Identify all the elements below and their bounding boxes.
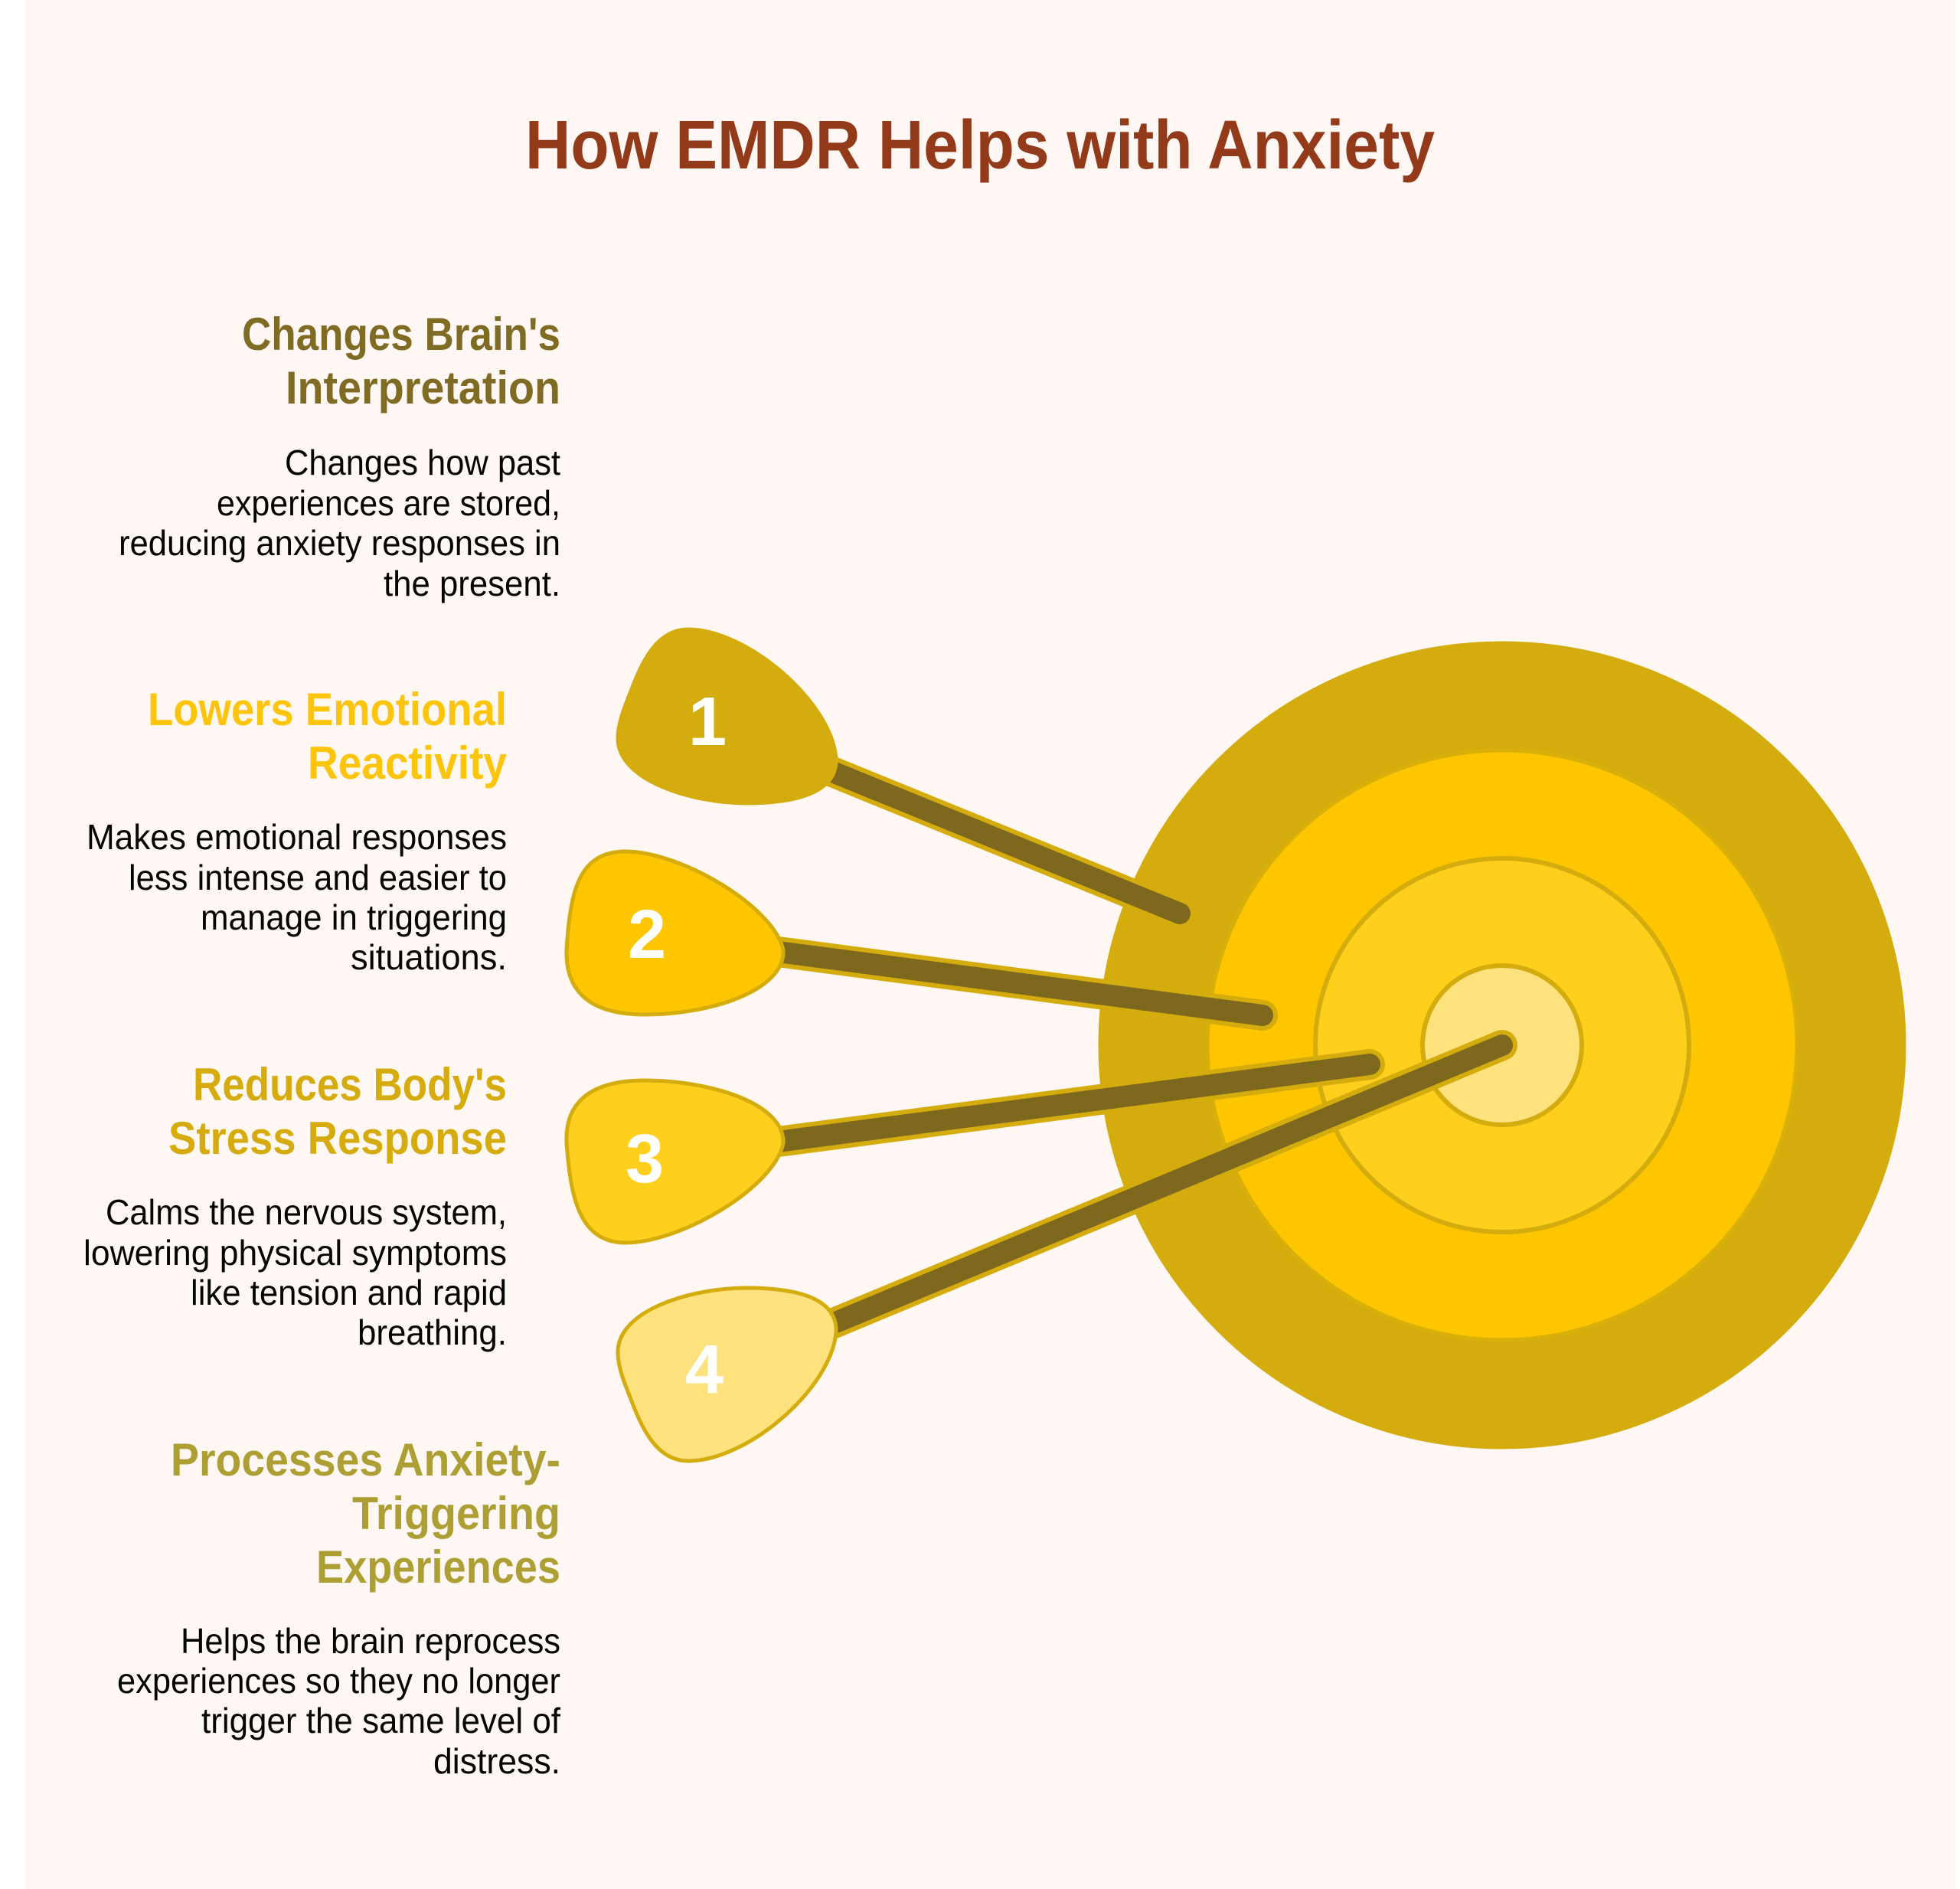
dart 2 head (567, 851, 783, 1015)
text block: changes brain's interpretation (119, 309, 560, 603)
heading: processes anxiety-triggering experiences (171, 1434, 560, 1593)
heading: changes brain's interpretation: Changes Brain's (242, 309, 560, 360)
body text: reduces body's stress response: lowering physical symptoms (83, 1233, 507, 1273)
body text: lowers emotional reactivity: Makes emotional responses (87, 817, 507, 857)
dart 2 (567, 851, 1263, 1015)
body text: changes brain's interpretation: the present. (384, 564, 560, 603)
text block: reduces body's stress response (83, 1059, 507, 1352)
heading: lowers emotional reactivity: Reactivity (308, 737, 508, 789)
heading: changes brain's interpretation: Interpretation (286, 362, 560, 413)
body text: processes anxiety-triggering experiences: distress. (433, 1741, 560, 1781)
dart 2 number: 2 (628, 897, 666, 973)
dart 4 head (618, 1288, 836, 1461)
heading: processes anxiety-triggering experiences: Experiences (316, 1541, 560, 1593)
body text: reduces body's stress response: breathing. (358, 1312, 507, 1352)
body text: processes anxiety-triggering experiences (117, 1621, 560, 1781)
dart 3 number: 3 (626, 1121, 664, 1198)
body text: reduces body's stress response (83, 1192, 507, 1352)
dart 4 (618, 1045, 1502, 1461)
dart 3 shaft (778, 1064, 1370, 1142)
heading: reduces body's stress response (168, 1059, 507, 1164)
body text: changes brain's interpretation (119, 443, 560, 603)
dart 4 shaft (828, 1045, 1502, 1325)
heading: reduces body's stress response: Stress Response (168, 1113, 507, 1164)
dart 1 shaft (827, 770, 1180, 913)
body text: reduces body's stress response: like tension and rapid (191, 1273, 507, 1312)
dart 1 number: 1 (688, 684, 727, 760)
text block: processes anxiety-triggering experiences (117, 1434, 560, 1781)
dart 1 (618, 629, 1180, 913)
heading: lowers emotional reactivity (148, 684, 508, 789)
body text: lowers emotional reactivity: manage in triggering (201, 897, 507, 937)
bullseye (1423, 966, 1582, 1125)
body text: lowers emotional reactivity: less intense and easier to (129, 858, 507, 897)
heading: processes anxiety-triggering experiences: Processes Anxiety- (171, 1434, 560, 1485)
body text: processes anxiety-triggering experiences: trigger the same level of (201, 1701, 560, 1740)
body text: lowers emotional reactivity (87, 817, 507, 977)
body text: changes brain's interpretation: experiences are stored, (217, 483, 560, 523)
heading: processes anxiety-triggering experiences: Triggering (352, 1488, 560, 1539)
heading: reduces body's stress response: Reduces Body's (193, 1059, 507, 1110)
outer ring (1100, 643, 1904, 1447)
body text: changes brain's interpretation: Changes how past (285, 443, 560, 482)
body text: processes anxiety-triggering experiences: experiences so they no longer (117, 1661, 560, 1701)
dart 1 head (618, 629, 836, 803)
body text: changes brain's interpretation: reducing anxiety responses in (119, 523, 560, 563)
body text: reduces body's stress response: Calms the nervous system, (106, 1192, 507, 1232)
heading: lowers emotional reactivity: Lowers Emotional (148, 684, 507, 735)
target: concentric rings (1100, 643, 1904, 1447)
body text: lowers emotional reactivity: situations. (351, 937, 507, 977)
body text: processes anxiety-triggering experiences: Helps the brain reprocess (181, 1621, 560, 1661)
dart 3 head (567, 1080, 783, 1243)
dart 3 (567, 1064, 1370, 1243)
text block: lowers emotional reactivity (87, 684, 508, 977)
heading: changes brain's interpretation (242, 309, 560, 413)
third ring (1315, 858, 1689, 1232)
dart 4 number: 4 (685, 1332, 724, 1408)
title: How EMDR Helps with Anxiety (525, 107, 1435, 184)
dart 2 shaft (778, 952, 1263, 1015)
second ring (1207, 750, 1797, 1340)
